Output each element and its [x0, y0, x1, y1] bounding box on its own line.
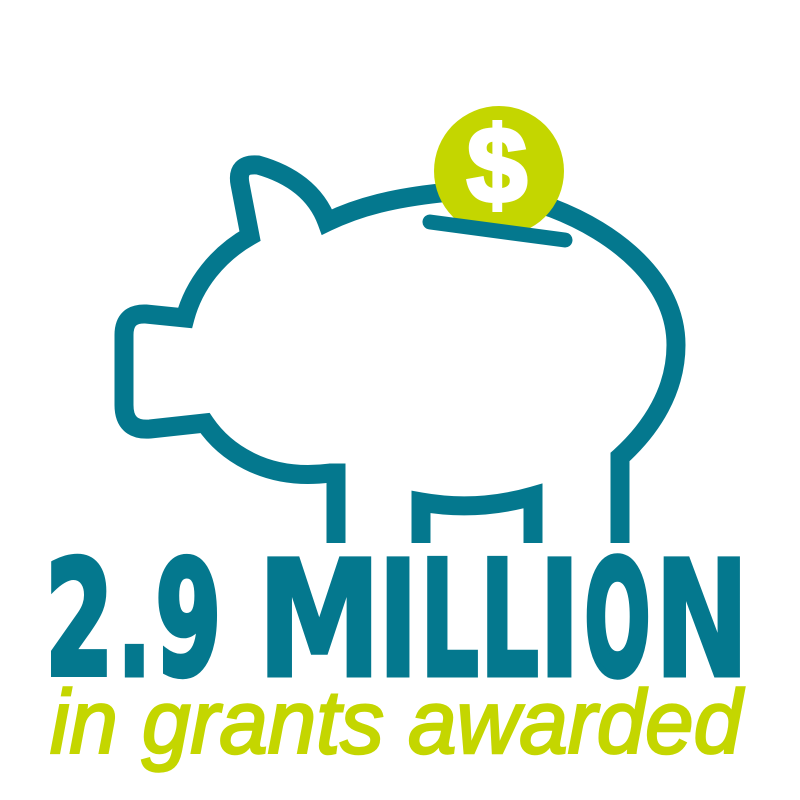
- headline: 2.9 MILLION: 9: [155, 528, 221, 712]
- headline: 2.9 MILLION: N: [654, 527, 749, 715]
- headline: 2.9 MILLION: O: [585, 528, 650, 712]
- coin disc: [434, 106, 564, 236]
- headline: 2.9 MILLION: 2: [45, 528, 114, 712]
- headline: 2.9 MILLION: I: [378, 527, 419, 715]
- headline: 2.9 MILLION: .: [116, 527, 153, 715]
- mask below coin slot: [420, 226, 570, 262]
- icon: piggy bank: [124, 104, 676, 543]
- subheading: in grants awarded: in grants awarded: [50, 673, 745, 773]
- coin slot: [430, 222, 565, 240]
- headline: 2.9 MILLION: L: [420, 526, 479, 713]
- headline: 2.9 MILLION: L: [480, 526, 539, 713]
- dollar sign: $: [467, 104, 527, 225]
- pig body outline: [124, 165, 676, 543]
- headline: 2.9 MILLION: M: [257, 527, 382, 715]
- pig belly between legs: [421, 496, 533, 543]
- icon: coin: [434, 104, 564, 236]
- headline: 2.9 MILLION: I: [538, 527, 581, 715]
